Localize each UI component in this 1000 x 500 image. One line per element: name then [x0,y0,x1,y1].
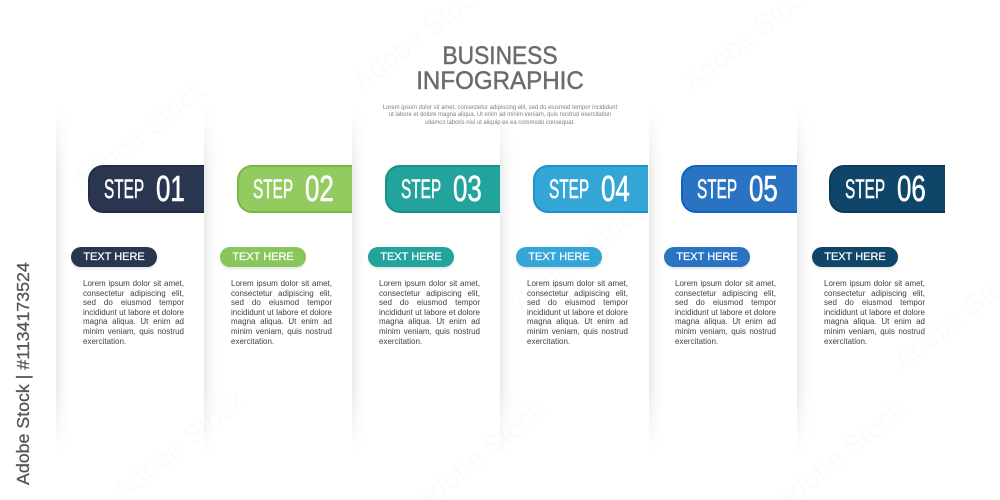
body text 02: magna aliqua. Ut enim ad [231,317,332,326]
body text 05: magna aliqua. Ut enim ad [675,317,776,326]
body text 03: sed do eiusmod tempor [379,298,480,307]
body text 03: magna aliqua. Ut enim ad [379,317,480,326]
body text 01: magna aliqua. Ut enim ad [83,317,184,326]
body text 06: magna aliqua. Ut enim ad [824,317,925,326]
body text 01: exercitation. [83,337,126,346]
step badge 03: STEP [401,174,441,204]
body text 04: exercitation. [527,337,570,346]
subtitle text block: ut labore et dolore magna aliqua. Ut enim ad minim veniam, quis nostrud exercitation [389,112,611,118]
step badge 02: STEP [253,174,293,204]
subtitle text block: ullamco laboris nisi ut aliquip ex ea commodo consequat. [425,120,575,126]
pill label 02 [220,247,306,267]
body text 06: incididunt ut labore et dolore [824,308,925,317]
body text 03: Lorem ipsum dolor sit amet, [379,279,480,288]
subtitle text block [383,104,618,126]
body text 05: consectetur adipiscing elit, [675,289,776,298]
body text 04: sed do eiusmod tempor [527,298,628,307]
pill label 06: TEXT HERE [824,251,886,263]
body text 03: minim veniam, quis nostrud [379,327,480,336]
pill label 05: TEXT HERE [676,251,738,263]
pill label 03: TEXT HERE [380,251,442,263]
body text 05 [675,279,776,346]
body text 03: exercitation. [379,337,422,346]
step badge 01: STEP [104,174,144,204]
panel: step 04 [516,165,648,346]
pill label 04: TEXT HERE [528,251,590,263]
pill label 04 [516,247,602,267]
step badge 02 [237,165,352,213]
body text 05: sed do eiusmod tempor [675,298,776,307]
body text 01: sed do eiusmod tempor [83,298,184,307]
body text 04: incididunt ut labore et dolore [527,308,628,317]
body text 05: incididunt ut labore et dolore [675,308,776,317]
step badge 05 [681,165,797,213]
pill label 02: TEXT HERE [232,251,294,263]
title: BUSINESS [442,42,558,70]
body text 06 [824,279,925,346]
pill label 01 [71,247,157,267]
body text 01: Lorem ipsum dolor sit amet, [83,279,184,288]
step badge 05: 05 [749,168,778,209]
step badge 06: STEP [845,174,885,204]
body text 04: consectetur adipiscing elit, [527,289,628,298]
pill label 01: TEXT HERE [83,251,145,263]
body text 04: magna aliqua. Ut enim ad [527,317,628,326]
body text 02: minim veniam, quis nostrud [231,327,332,336]
body text 06: minim veniam, quis nostrud [824,327,925,336]
body text 06: consectetur adipiscing elit, [824,289,925,298]
text: Adobe Stock [507,195,651,317]
pill label 06 [812,247,898,267]
panel: step 06 [812,165,945,346]
body text 01: incididunt ut labore et dolore [83,308,184,317]
body text 06: sed do eiusmod tempor [824,298,925,307]
body text 01: minim veniam, quis nostrud [83,327,184,336]
panel: step 03 [368,165,500,346]
step badge 02: 02 [305,168,334,209]
step badge 04: 04 [601,168,630,209]
panel: step 02 [220,165,352,346]
body text 02: consectetur adipiscing elit, [231,289,332,298]
step badge 04: STEP [549,174,589,204]
step badge 06: 06 [897,168,926,209]
body text 06: exercitation. [824,337,867,346]
body text 03: incididunt ut labore et dolore [379,308,480,317]
step badge 01 [88,165,204,213]
stock id vertical text: Adobe Stock | #1134173524 [13,262,33,485]
step badge 01: 01 [156,168,185,209]
body text 04: Lorem ipsum dolor sit amet, [527,279,628,288]
body text 02 [231,279,332,346]
body text 04: minim veniam, quis nostrud [527,327,628,336]
pill label 03 [368,247,454,267]
body text 03 [379,279,480,346]
panel: step 01 [70,165,204,346]
text: Adobe Stock [67,75,211,197]
body text 04 [527,279,628,346]
body text 05: exercitation. [675,337,718,346]
body text 02: exercitation. [231,337,274,346]
body text 02: Lorem ipsum dolor sit amet, [231,279,332,288]
step badge 04 [533,165,648,213]
body text 02: incididunt ut labore et dolore [231,308,332,317]
pill label 05 [664,247,750,267]
body text 05: Lorem ipsum dolor sit amet, [675,279,776,288]
body text 06: Lorem ipsum dolor sit amet, [824,279,925,288]
title: INFOGRAPHIC [416,67,584,95]
body text 01: consectetur adipiscing elit, [83,289,184,298]
body text 03: consectetur adipiscing elit, [379,289,480,298]
title [416,42,584,95]
subtitle text block: Lorem ipsum dolor sit amet, consectetur adipiscing elit, sed do eiusmod tempor incididunt [383,104,617,110]
step badge 06 [829,165,945,213]
step badge 05: STEP [697,174,737,204]
body text 01 [83,279,184,346]
body text 05: minim veniam, quis nostrud [675,327,776,336]
step badge 03 [385,165,500,213]
panel: step 05 [664,165,797,346]
step badge 03: 03 [453,168,482,209]
body text 02: sed do eiusmod tempor [231,298,332,307]
